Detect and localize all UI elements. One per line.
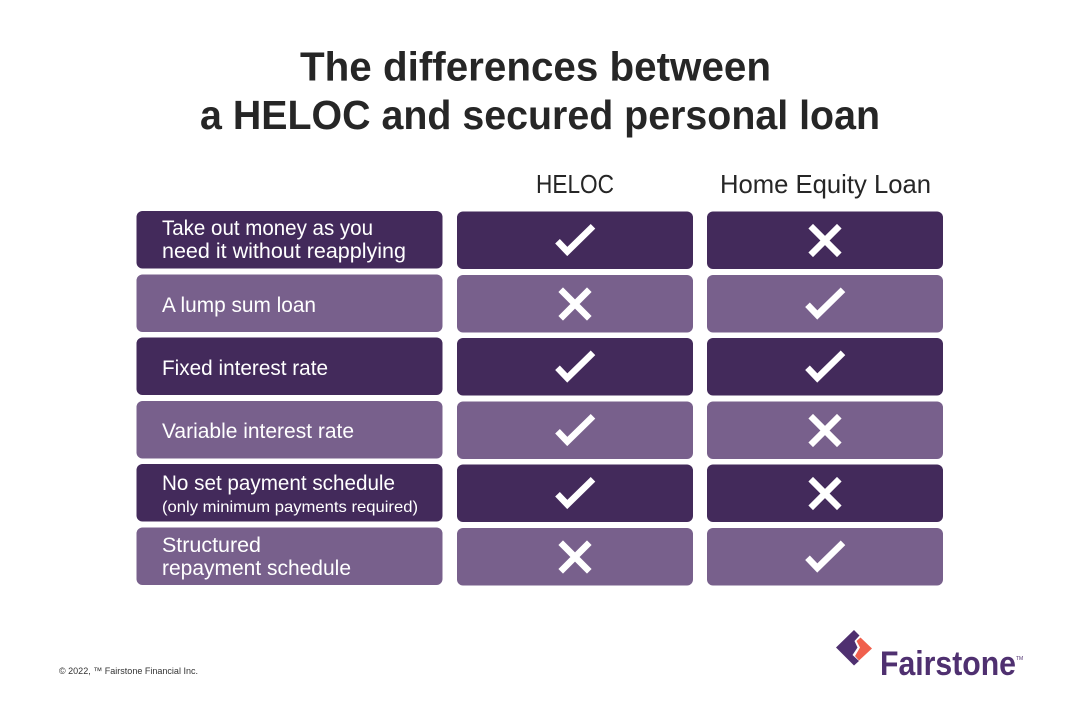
row 5: no set payment schedule: No set payment schedule [162, 472, 395, 495]
row 6: structured repayment schedule: Structured [162, 534, 261, 557]
logo mark [836, 630, 872, 666]
row 6: structured repayment schedule [136, 528, 943, 586]
row 4: variable interest rate: Variable interest rate [162, 420, 354, 443]
row 1: take out money as needed: Take out money as you [162, 217, 373, 240]
title [200, 44, 880, 138]
title: a HELOC and secured personal loan [200, 92, 880, 138]
row 6: structured repayment schedule: repayment schedule [162, 557, 351, 580]
row 5: no set payment schedule [136, 464, 943, 522]
row 3: fixed interest rate [136, 338, 943, 396]
row 4: variable interest rate [136, 401, 943, 459]
title: The differences between [300, 44, 771, 90]
logo wordmark: Fairstone [880, 645, 1016, 683]
trademark: TM [1016, 656, 1023, 662]
copyright note: © 2022, ™ Fairstone Financial Inc. [59, 666, 198, 677]
row 1: take out money as needed [136, 211, 943, 269]
row 2: a lump sum loan [136, 274, 943, 332]
row 1: take out money as needed: need it without reapplying [162, 240, 406, 263]
row 3: fixed interest rate: Fixed interest rate [162, 357, 328, 380]
column heading: Home Equity Loan: Home Equity Loan [720, 169, 931, 199]
column heading: HELOC: HELOC [536, 169, 614, 199]
logo: Fairstone [836, 630, 1023, 683]
row 5: no set payment schedule: (only minimum payments required) [162, 499, 418, 516]
row 2: a lump sum loan: A lump sum loan [162, 294, 316, 317]
